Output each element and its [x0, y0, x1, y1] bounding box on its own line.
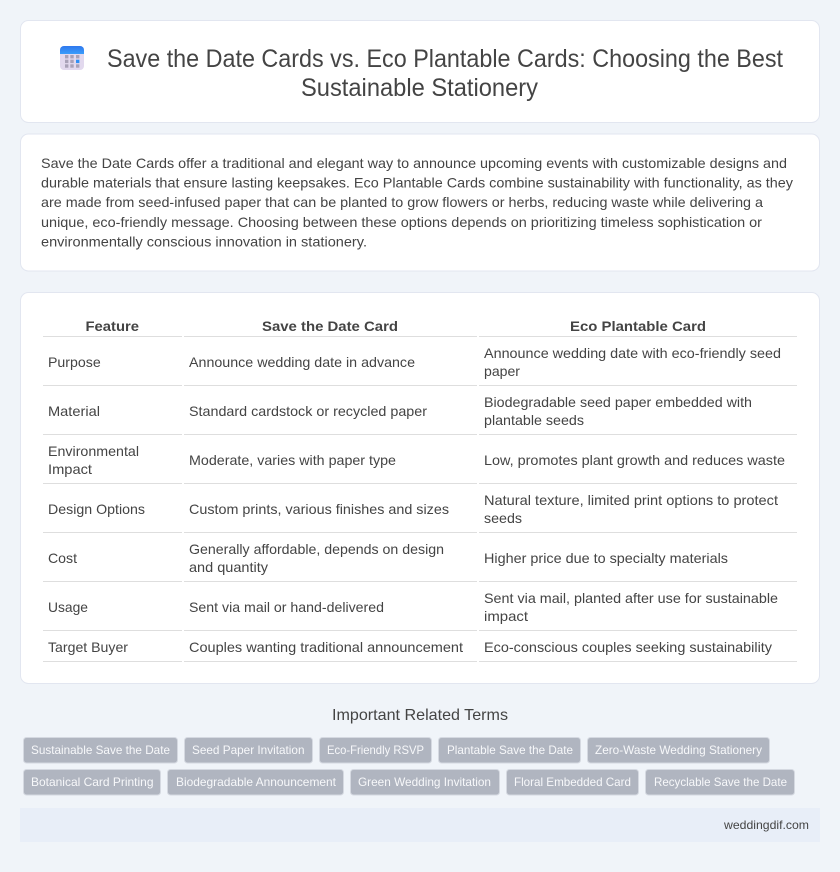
- tag: zero-waste wedding stationery: [588, 738, 770, 763]
- table row: design options: [48, 492, 778, 526]
- tag: sustainable save the date: [24, 738, 178, 763]
- table row: usage: [48, 590, 778, 624]
- table row: design options: Natural texture, limited print options to protect: [484, 492, 778, 508]
- table row: material: Biodegradable seed paper embedded with: [484, 394, 752, 410]
- icon: calendar: [60, 46, 84, 70]
- tag: recyclable save the date: Recyclable Save the Date: [654, 775, 787, 789]
- table row: cost: Cost: [48, 550, 77, 566]
- table row: usage: Sent via mail, planted after use for sustainable: [484, 590, 778, 606]
- text block: introduction paragraph: unique, eco-friendly message. Choosing between these options depends on prioritizing timeless sophistication or: [41, 214, 762, 230]
- tag: seed paper invitation: [184, 738, 312, 763]
- text block: introduction paragraph: durable materials that ensure lasting keepsakes. Eco Plantable Cards combine sustainability with functionality, as they: [41, 175, 793, 191]
- table row: material: [48, 394, 752, 428]
- table row: usage: impact: [484, 608, 528, 624]
- table header row: Feature: [86, 318, 139, 334]
- tag list: related terms: [24, 738, 794, 795]
- panel: header: [20, 20, 820, 122]
- table row: design options: Custom prints, various finishes and sizes: [189, 501, 449, 517]
- heading: important related terms: Important Related Terms: [332, 707, 508, 724]
- tag: zero-waste wedding stationery: Zero-Waste Wedding Stationery: [595, 743, 762, 757]
- table row: target buyer: [48, 639, 772, 655]
- tag: floral embedded card: [506, 770, 638, 795]
- table header row: [86, 318, 706, 334]
- table row: usage: Usage: [48, 599, 88, 615]
- table row: environmental impact: Environmental: [48, 443, 139, 459]
- panel: introduction: [20, 134, 820, 271]
- tag: green wedding invitation: Green Wedding Invitation: [358, 775, 491, 789]
- table row: cost: Higher price due to specialty materials: [484, 550, 728, 566]
- table row: material: plantable seeds: [484, 412, 584, 428]
- tag: floral embedded card: Floral Embedded Card: [514, 775, 631, 789]
- table row: cost: and quantity: [189, 559, 268, 575]
- title: [107, 45, 783, 102]
- tag: seed paper invitation: Seed Paper Invitation: [192, 743, 304, 757]
- table row: material: Material: [48, 403, 100, 419]
- table row: environmental impact: [48, 443, 785, 477]
- table row: purpose: Announce wedding date with eco-friendly seed: [484, 345, 781, 361]
- tag: biodegradable announcement: [168, 770, 344, 795]
- tag: green wedding invitation: [350, 770, 500, 795]
- table row: cost: [48, 541, 728, 575]
- tag: plantable save the date: [438, 738, 580, 763]
- table header row: Eco Plantable Card: [570, 318, 706, 334]
- text block: introduction paragraph: environmentally conscious innovation in stationery.: [41, 233, 367, 249]
- table header row: Save the Date Card: [262, 318, 398, 334]
- text block: introduction paragraph: Save the Date Cards offer a traditional and elegant way to announce upcoming events with customizable designs and: [41, 155, 787, 171]
- tag: biodegradable announcement: Biodegradable Announcement: [176, 775, 337, 789]
- table row: environmental impact: Impact: [48, 461, 92, 477]
- text block: introduction paragraph: [41, 155, 793, 249]
- tag: sustainable save the date: Sustainable Save the Date: [31, 743, 170, 757]
- table row: usage: Sent via mail or hand-delivered: [189, 599, 384, 615]
- tag: eco-friendly rsvp: Eco-Friendly RSVP: [327, 743, 424, 757]
- table row: design options: seeds: [484, 510, 522, 526]
- table row: purpose: Purpose: [48, 354, 101, 370]
- table row: environmental impact: Low, promotes plant growth and reduces waste: [484, 452, 785, 468]
- text block: introduction paragraph: are made from seed-infused paper that can be planted to grow flowers or herbs, reducing waste while delivering a: [41, 194, 763, 210]
- tag: plantable save the date: Plantable Save the Date: [447, 743, 573, 757]
- tag: botanical card printing: [24, 770, 160, 795]
- table row: cost: Generally affordable, depends on design: [189, 541, 444, 557]
- tag: botanical card printing: Botanical Card Printing: [31, 775, 154, 789]
- panel: comparison table: [20, 292, 820, 684]
- tag: eco-friendly rsvp: [320, 738, 432, 763]
- table row: purpose: paper: [484, 363, 520, 379]
- table row: environmental impact: Moderate, varies with paper type: [189, 452, 396, 468]
- title: Save the Date Cards vs. Eco Plantable Cards: Choosing the Best: [107, 45, 783, 73]
- table row: purpose: [48, 345, 781, 379]
- table row: target buyer: Target Buyer: [48, 639, 128, 655]
- tag: recyclable save the date: [646, 770, 794, 795]
- table row: target buyer: Eco-conscious couples seeking sustainability: [484, 639, 772, 655]
- title: Sustainable Stationery: [301, 74, 538, 102]
- table row: purpose: Announce wedding date in advance: [189, 354, 415, 370]
- footer: [20, 808, 820, 842]
- footer: weddingdif.com: [723, 818, 809, 832]
- table row: design options: Design Options: [48, 501, 145, 517]
- table row: material: Standard cardstock or recycled paper: [189, 403, 427, 419]
- table row: target buyer: Couples wanting traditional announcement: [189, 639, 463, 655]
